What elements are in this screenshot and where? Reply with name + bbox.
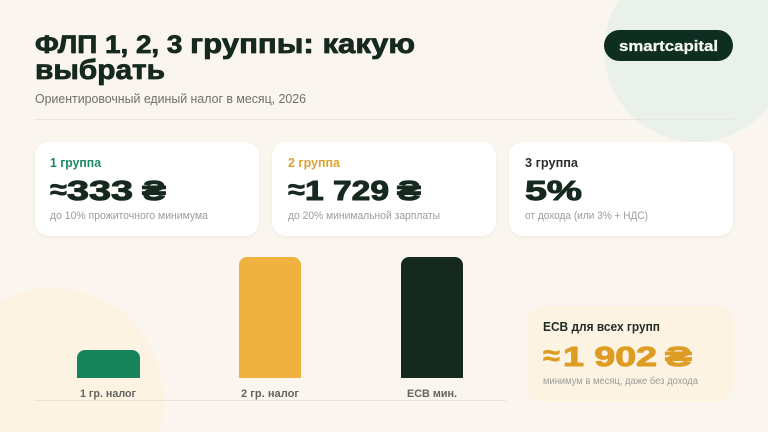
title: выбрать [35,54,165,85]
bar chart [35,257,506,401]
ESV value: ≈ [543,340,560,371]
ESV label: ЕСВ для всех групп [543,320,660,334]
logo: smartcapital: smartcapital [619,38,718,55]
bar: 1 group tax [77,350,140,378]
ESV value [543,340,692,372]
panel: group 3 [509,142,733,236]
bar: ESV min [401,257,463,378]
bar: 2 group tax [239,257,301,378]
group 2 note: до 20% минимальной зарплаты [288,210,440,222]
group 1 value [50,174,166,206]
group 3 value: 5% [525,175,582,206]
group 2 label: 2 группа [288,156,341,170]
bar label: ESV: ЕСВ мин. [407,388,457,400]
panel: ESV callout [527,306,733,402]
panel: group 1 [35,142,259,236]
group 1 value: 333 [67,175,133,206]
group 1 value: ≈ [50,174,67,205]
group 3 label: 3 группа [525,156,579,170]
bar label: 2 group: 2 гр. налог [241,388,299,400]
group 1 note: до 10% прожиточного минимума [50,210,209,222]
title [35,28,415,85]
bar label: 1 group: 1 гр. налог [80,388,136,400]
logo: smartcapital [604,30,733,61]
ESV note: минимум в месяц, даже без дохода [543,375,698,387]
title: ФЛП 1, 2, 3 группы: какую [35,28,415,59]
group 2 value: ≈ [288,174,305,205]
group 2 value [288,174,421,206]
decorative circle: bottom left [0,288,164,432]
group 1 value: ₴ [142,175,166,206]
group 1 label: 1 группа [50,156,102,170]
decorative circle: top right [604,0,768,142]
group 3 note: от дохода (или 3% + НДС) [525,210,648,222]
ESV value: ₴ [665,341,692,372]
group 2 value: ₴ [397,175,421,206]
group 2 value: 1 729 [305,175,389,206]
panel: group 2 [272,142,496,236]
ESV value: 1 902 [563,341,657,372]
subtitle: Ориентировочный единый налог в месяц, 2026 [35,91,306,106]
